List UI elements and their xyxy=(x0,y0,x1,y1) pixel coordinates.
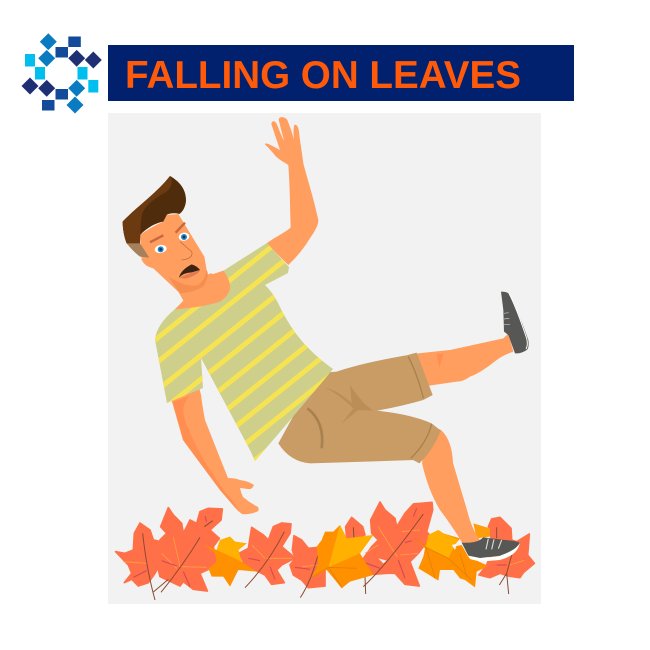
logo xyxy=(22,33,102,113)
raised leg, shoe and shorts xyxy=(278,292,529,463)
chin shadow xyxy=(168,270,208,293)
hair xyxy=(123,176,186,243)
nose xyxy=(180,242,192,260)
eyebrows xyxy=(150,235,163,242)
eyes xyxy=(154,244,167,254)
title banner xyxy=(108,45,574,101)
neck xyxy=(175,271,230,309)
orange leaf, left xyxy=(205,537,257,587)
shorts creases xyxy=(325,385,373,423)
leaf pile xyxy=(116,502,534,600)
mouth xyxy=(179,270,200,279)
orange leaves, centre and right xyxy=(312,523,490,588)
sideburn xyxy=(127,243,149,258)
raised arm xyxy=(265,117,318,265)
coral leaves, right group xyxy=(346,502,534,594)
coral leaves, left group xyxy=(116,508,325,600)
man falling xyxy=(123,117,529,562)
raised shoe xyxy=(501,292,529,353)
raised leg xyxy=(412,333,513,386)
shorts xyxy=(278,355,432,463)
head xyxy=(123,176,208,293)
front shoe xyxy=(462,537,520,562)
lower arm and hand xyxy=(170,383,259,514)
striped shirt xyxy=(155,243,333,461)
face xyxy=(140,214,208,293)
title: FALLING ON LEAVES xyxy=(125,54,521,97)
front leg xyxy=(422,425,480,546)
illustration panel xyxy=(108,113,541,604)
shorts cuffs xyxy=(408,353,433,400)
